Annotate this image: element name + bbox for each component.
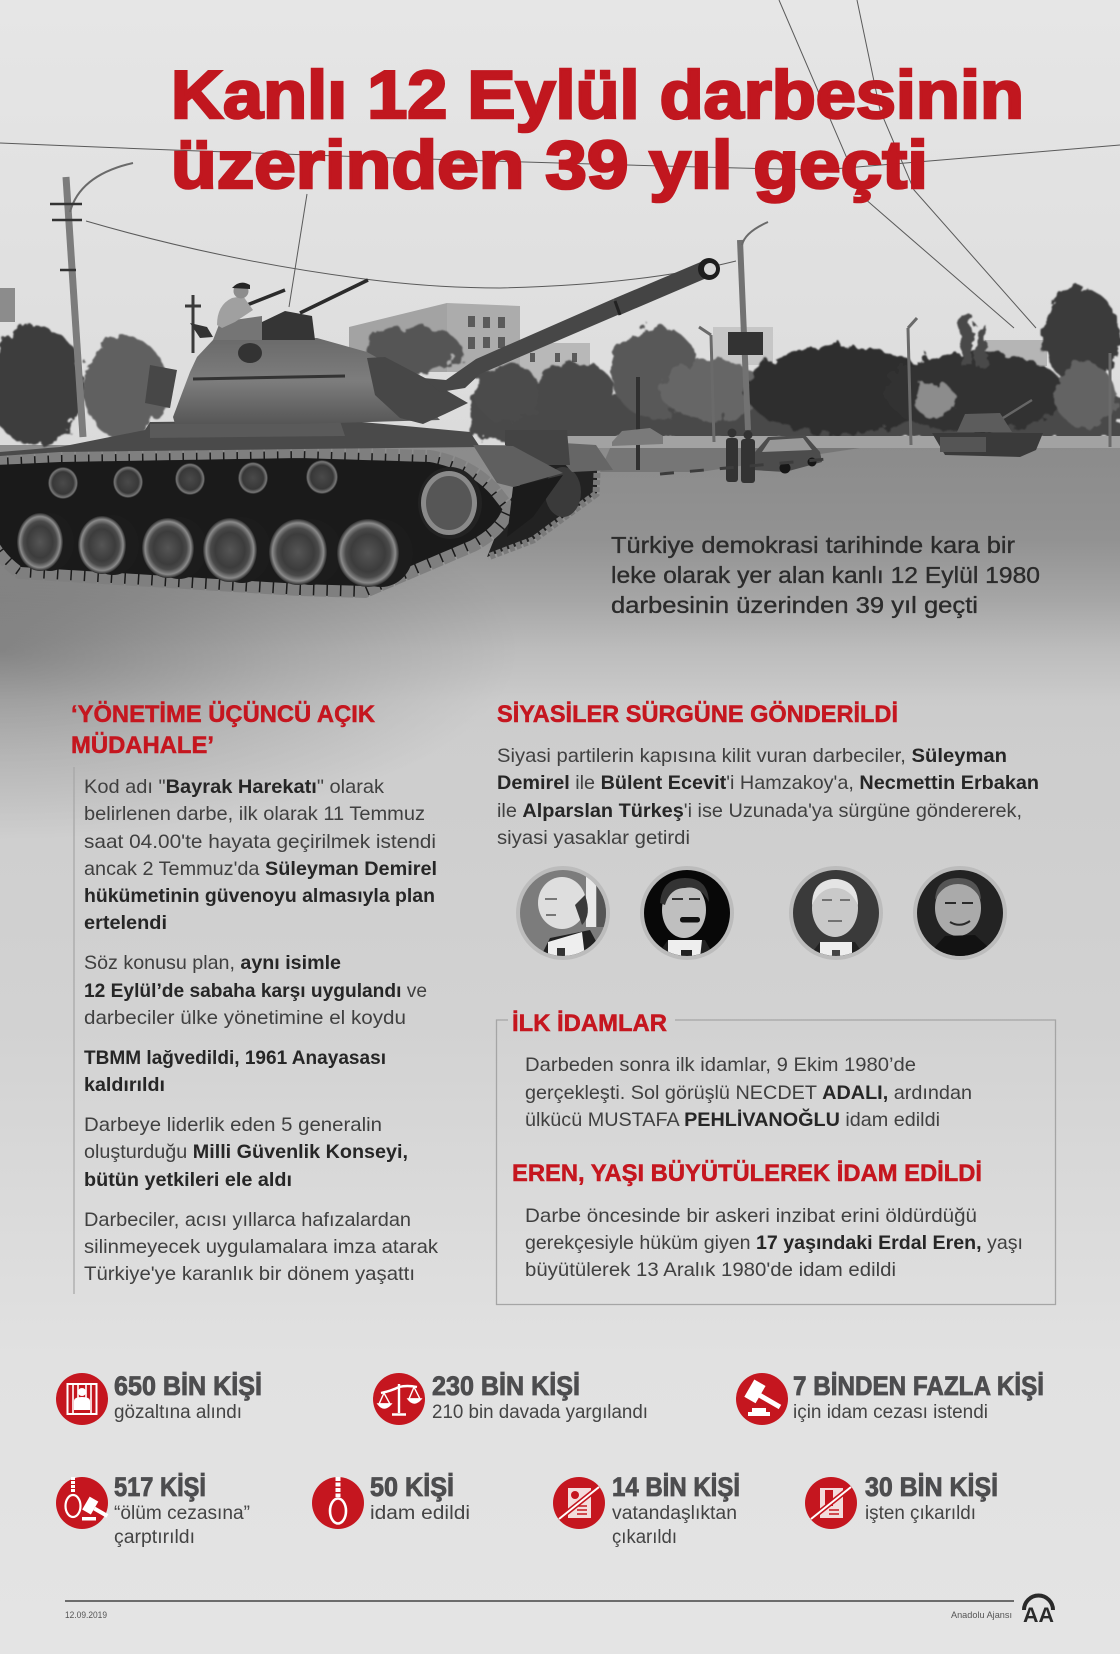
left column text: Kod adı "Bayrak Harekatı" olarak [84, 776, 384, 798]
left column text: saat 04.00'te hayata geçirilmek istendi [84, 831, 436, 853]
intro text: leke olarak yer alan kanlı 12 Eylül 1980 [611, 562, 1040, 588]
footer date: 12.09.2019 [65, 1610, 107, 1621]
icon: gavel [736, 1373, 788, 1425]
stat: 30 bin kişi: işten çıkarıldı [865, 1503, 976, 1524]
stat: 14 bin kişi: 14 BİN KİŞİ [612, 1472, 740, 1502]
left column text: Darbeciler, acısı yıllarca hafızalardan [84, 1209, 411, 1231]
logo: Anadolu Ajansı: AA [1023, 1604, 1054, 1627]
icon: noose [312, 1477, 364, 1529]
road wheels [17, 513, 413, 587]
stat: 14 bin kişi: vatandaşlıktan [612, 1503, 737, 1524]
stat: 650 bin kişi: 650 BİN KİŞİ [114, 1371, 262, 1401]
icon: prison bars [56, 1373, 108, 1425]
icon: crossed-out citizenship document [553, 1477, 605, 1529]
intro text: darbesinin üzerinden 39 yıl geçti [611, 592, 978, 618]
heading: Yönetime üçüncü açık müdahale: ‘YÖNETİME ÜÇÜNCÜ AÇIK [71, 701, 376, 728]
heading: Yönetime üçüncü açık müdahale: MÜDAHALE’ [71, 732, 214, 759]
left column text: Türkiye'ye karanlık bir dönem yaşattı [84, 1263, 415, 1285]
left column text: kaldırıldı [84, 1074, 165, 1096]
overhead wires [0, 0, 1120, 328]
portrait: Süleyman Demirel [516, 866, 610, 960]
left column text: bütün yetkileri ele aldı [84, 1169, 292, 1191]
standing men [726, 428, 755, 483]
stat: 7 binden fazla kişi [736, 1371, 1044, 1425]
stat: 14 bin kişi [553, 1472, 740, 1548]
rear stowage can [145, 365, 177, 408]
left column text: Darbeye liderlik eden 5 generalin [84, 1114, 382, 1136]
stat: 230 bin kişi: 210 bin davada yargılandı [432, 1402, 648, 1423]
left column text [84, 776, 438, 1285]
exile text: siyasi yasaklar getirdi [497, 827, 690, 849]
heading: Eren: EREN, YAŞI BÜYÜTÜLEREK İDAM EDİLDİ [512, 1160, 982, 1187]
heading: Siyasiler sürgüne gönderildi: SİYASİLER SÜRGÜNE GÖNDERİLDİ [497, 701, 898, 728]
icon: noose and gavel [56, 1477, 111, 1529]
title [171, 57, 1024, 203]
track [0, 451, 511, 597]
left column text: TBMM lağvedildi, 1961 Anayasası [84, 1047, 386, 1069]
intro text: Türkiye demokrasi tarihinde kara bir [611, 532, 1015, 558]
stat: 517 kişi: “ölüm cezasına” [114, 1503, 250, 1524]
first executions text: ülkücü MUSTAFA PEHLİVANOĞLU idam edildi [525, 1108, 940, 1131]
buildings [349, 303, 1047, 383]
cupola and machine guns [190, 280, 368, 340]
icon: crossed-out work document [805, 1477, 857, 1529]
stat: 7 binden fazla kişi: 7 BİNDEN FAZLA KİŞİ [793, 1371, 1044, 1401]
drive sprocket [418, 467, 482, 539]
stat: 230 bin kişi: 230 BİN KİŞİ [432, 1371, 580, 1401]
heading: İlk idamlar: İLK İDAMLAR [512, 1010, 667, 1037]
portrait: Bülent Ecevit [640, 866, 734, 960]
stat: 650 bin kişi [56, 1371, 262, 1425]
photo: main tank [0, 258, 720, 597]
stat: 517 kişi: çarptırıldı [114, 1527, 195, 1548]
gun barrel [423, 258, 720, 392]
intro text [611, 532, 1040, 618]
left column text: 12 Eylül’de sabaha karşı uygulandı ve [84, 980, 427, 1002]
panel: executions [496, 1010, 1056, 1304]
Erdal Eren text: Darbe öncesinde bir askeri inzibat erini öldürdüğü [525, 1205, 977, 1227]
stat: 650 bin kişi: gözaltına alındı [114, 1402, 242, 1423]
stat: 517 kişi: 517 KİŞİ [114, 1472, 206, 1502]
title: üzerinden 39 yıl geçti [171, 127, 928, 203]
return rollers [48, 460, 338, 499]
left column text: silinmeyecek uygulamalara imza atarak [84, 1236, 438, 1258]
hull deck [0, 420, 563, 537]
stat: 14 bin kişi: çıkarıldı [612, 1527, 677, 1548]
title: Kanlı 12 Eylül darbesinin [171, 57, 1024, 133]
first executions text: gerçekleşti. Sol görüşlü NECDET ADALI, ardından [525, 1082, 972, 1104]
ground strip [560, 436, 1120, 472]
exile text [497, 745, 1039, 849]
soldier [217, 283, 253, 328]
kerb [660, 458, 838, 474]
exile text: Siyasi partilerin kapısına kilit vuran darbeciler, Süleyman [497, 745, 1007, 767]
flag [0, 288, 15, 322]
stat: 30 bin kişi [805, 1472, 998, 1529]
parked cars [612, 428, 822, 474]
road sign [728, 332, 763, 355]
first executions text: Darbeden sonra ilk idamlar, 9 Ekim 1980’de [525, 1054, 916, 1076]
icon: scales [373, 1373, 425, 1425]
left column text: ancak 2 Temmuz'da Süleyman Demirel [84, 858, 437, 880]
stat: 50 kişi: 50 KİŞİ [370, 1472, 454, 1502]
portrait: Necmettin Erbakan [789, 866, 883, 960]
left column rule [73, 767, 75, 1294]
exile text: Demirel ile Bülent Ecevit'i Hamzakoy'a, Necmettin Erbakan [497, 772, 1039, 794]
lamp posts and poles [50, 163, 1110, 470]
stat: 230 bin kişi [373, 1371, 648, 1425]
left column text: ertelendi [84, 912, 167, 934]
stat: 50 kişi [312, 1472, 470, 1529]
distant tank [932, 400, 1043, 457]
Erdal Eren text: büyütülerek 13 Aralık 1980'de idam edildi [525, 1259, 896, 1281]
first executions text [525, 1054, 972, 1131]
turret [173, 338, 468, 424]
far-side track [487, 430, 613, 557]
left column text: belirlenen darbe, ilk olarak 11 Temmuz [84, 803, 425, 825]
left column text: Söz konusu plan, aynı isimle [84, 952, 341, 974]
portrait: Alparslan Türkeş [913, 866, 1007, 960]
stat: 517 kişi [56, 1472, 250, 1548]
Erdal Eren text [525, 1205, 1023, 1281]
stat: 7 binden fazla kişi: için idam cezası istendi [793, 1402, 988, 1423]
stat: 30 bin kişi: 30 BİN KİŞİ [865, 1472, 998, 1502]
left column text: hükümetinin güvenoyu almasıyla plan [84, 885, 435, 907]
Erdal Eren text: gerekçesiyle hüküm giyen 17 yaşındaki Erdal Eren, yaşı [525, 1232, 1023, 1254]
footer rule [65, 1600, 1014, 1602]
exile text: ile Alparslan Türkeş'i ise Uzunada'ya sürgüne göndererek, [497, 800, 1022, 822]
left column text: oluşturduğu Milli Güvenlik Konseyi, [84, 1141, 408, 1163]
stat: 50 kişi: idam edildi [370, 1503, 470, 1524]
tree lines [0, 287, 1120, 445]
heading: Yönetime üçüncü açık müdahale [71, 701, 376, 759]
footer source: Anadolu Ajansı [951, 1610, 1012, 1621]
photo: street scene background [0, 0, 1120, 483]
left column text: darbeciler ülke yönetimine el koydu [84, 1007, 406, 1029]
